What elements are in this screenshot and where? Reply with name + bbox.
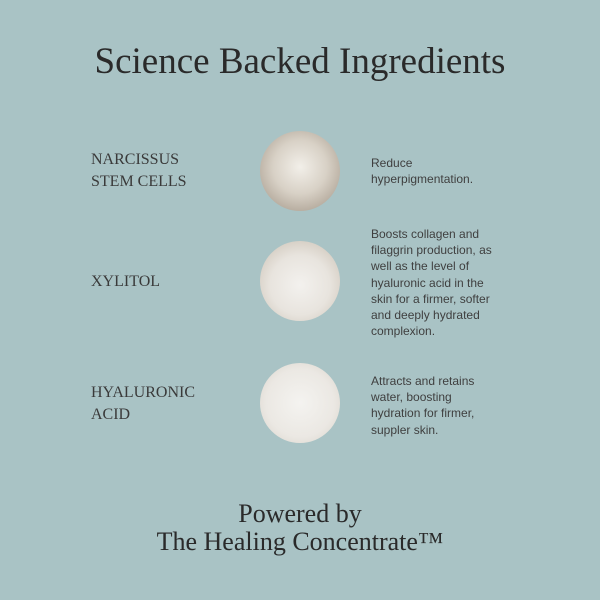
desc: narcissus: Reduce: [371, 156, 412, 170]
footer text: The Healing Concentrate™: [157, 527, 443, 556]
label: hyaluronic: [91, 384, 195, 423]
desc: xylitol: and deeply hydrated: [371, 308, 480, 322]
desc: xylitol: Boosts collagen and: [371, 227, 479, 241]
image: narcissus circle: [260, 131, 340, 211]
desc: xylitol: [371, 227, 492, 338]
label: hyaluronic: ACID: [91, 406, 130, 423]
desc: xylitol: hyaluronic acid in the: [371, 276, 484, 290]
image: xylitol circle: [260, 241, 340, 321]
label: xylitol: XYLITOL: [91, 273, 160, 290]
desc: hyaluronic: suppler skin.: [371, 423, 438, 437]
footer text: Powered by: [238, 499, 362, 528]
title: Science Backed Ingredients: [95, 41, 505, 82]
footer text: [157, 499, 443, 556]
desc: xylitol: complexion.: [371, 324, 435, 338]
image: hyaluronic circle: [260, 363, 340, 443]
label: narcissus: STEM CELLS: [91, 173, 187, 190]
desc: narcissus: hyperpigmentation.: [371, 172, 473, 186]
desc: hyaluronic: water, boosting: [371, 390, 452, 404]
desc: xylitol: skin for a firmer, softer: [371, 292, 490, 306]
desc: narcissus: [371, 156, 473, 186]
desc: hyaluronic: hydration for firmer,: [371, 406, 474, 420]
desc: xylitol: filaggrin production, as: [371, 243, 492, 257]
desc: xylitol: well as the level of: [371, 259, 469, 273]
desc: hyaluronic: Attracts and retains: [371, 374, 474, 388]
desc: hyaluronic: [371, 374, 474, 437]
label: narcissus: NARCISSUS: [91, 151, 179, 168]
label: narcissus: [91, 151, 187, 190]
label: hyaluronic: HYALURONIC: [91, 384, 195, 401]
